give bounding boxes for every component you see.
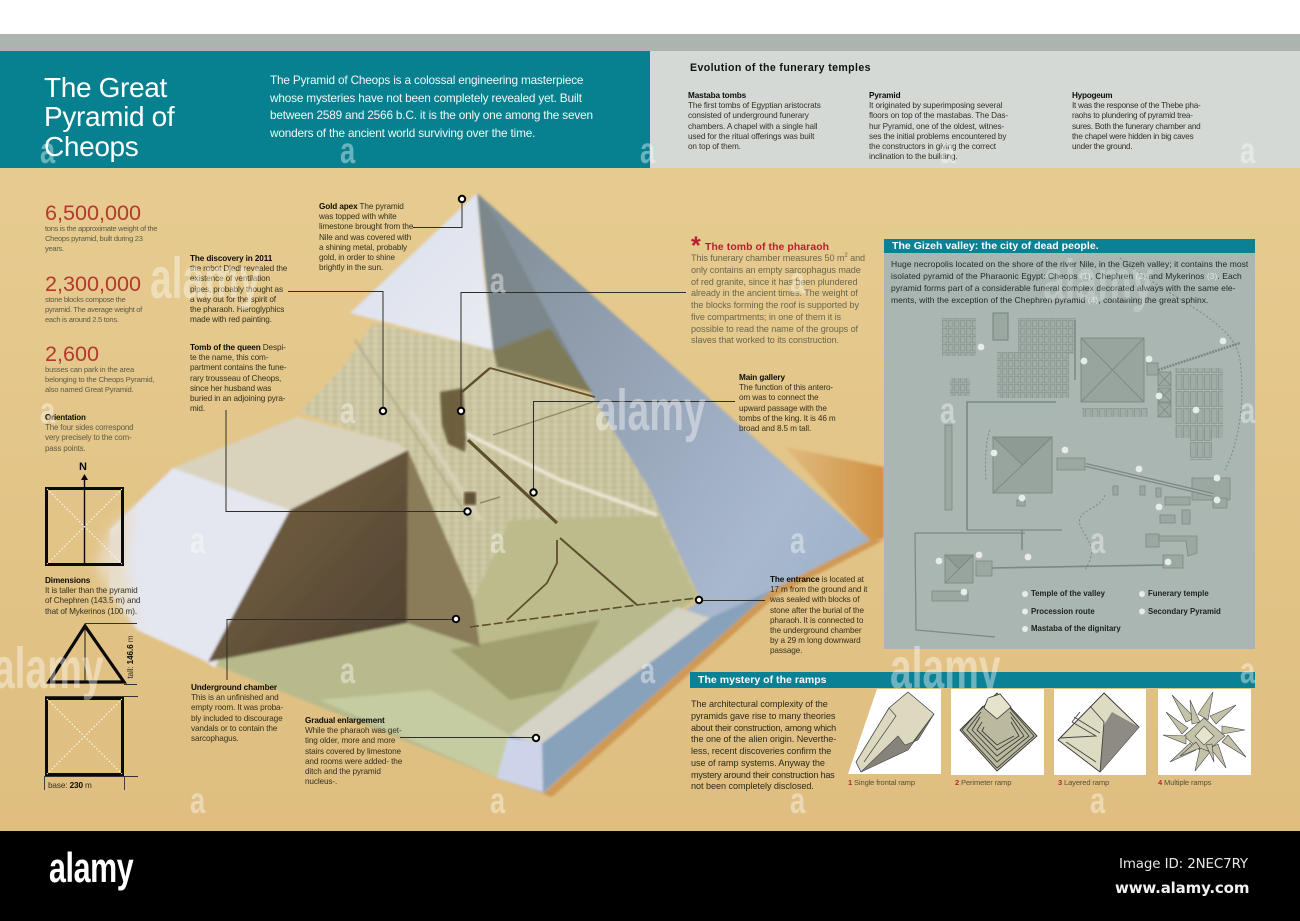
watermarks: a xyxy=(640,129,656,171)
callout: main gallery: The function of this antero- xyxy=(739,383,833,392)
callout: gradual enlargement xyxy=(305,716,402,786)
text: hypogeum: Hypogeum xyxy=(1072,91,1112,100)
white stripes xyxy=(463,432,657,515)
watermarks: a xyxy=(1240,389,1256,431)
callout: underground chamber: bly included to discourage xyxy=(191,714,283,723)
text: pyramid: the constructors in giving the correct xyxy=(869,142,996,151)
callout: main gallery xyxy=(739,373,836,433)
text: mastaba tombs: chambers. A chapel with a single hall xyxy=(688,122,817,131)
stat: 6,500,000: years. xyxy=(45,244,64,253)
callout: gradual enlargement: ditch and the pyramid xyxy=(305,767,381,776)
intro text: whose mysteries have not been completely revealed yet. Built xyxy=(270,91,582,105)
ramp illustration 1: single frontal ramp xyxy=(848,689,941,774)
text: Gizeh valley: pyramid forms part of a considerable funeral complex decorated always with the same ele- xyxy=(891,283,1236,293)
callout: gradual enlargement: While the pharaoh was get- xyxy=(305,726,402,735)
label: tall: tall: 146.6 m xyxy=(126,636,135,679)
text: tomb of the pharaoh xyxy=(691,252,865,345)
text: tomb of the pharaoh: of red granite, since it has been plundered xyxy=(691,276,857,286)
callout: discovery in 2011: a way out for the spirit of xyxy=(190,295,276,304)
watermarks: a xyxy=(340,129,356,171)
ramp illustration 4: multiple ramps xyxy=(1158,689,1251,775)
north label: N xyxy=(79,461,87,473)
watermarks: a xyxy=(940,129,956,171)
callout: gold apex: a shining metal, probably xyxy=(319,243,407,252)
text: tomb of the pharaoh: possible to read the name of the groups of xyxy=(691,324,858,334)
stat: 2,600: also named Great Pyramid. xyxy=(45,385,134,394)
king chamber xyxy=(440,388,466,452)
text: Gizeh valley: Huge necropolis located on the shore of the river Nile, in the Gizeh valley; it contains the most xyxy=(891,259,1248,269)
text: ramps: not been completely disclosed. xyxy=(691,781,814,791)
callout: the entrance: pharaoh. It is connected to xyxy=(770,616,863,625)
text: ramps xyxy=(691,699,836,791)
text: dimensions xyxy=(45,576,140,616)
stat: 6,500,000 xyxy=(45,200,158,253)
pyramid of Chephren xyxy=(993,437,1052,493)
stat: 2,300,000: stone blocks compose the xyxy=(45,295,125,304)
text: tomb of the pharaoh: already in the ancient times. The weight of xyxy=(691,288,858,298)
text: ramps: use of ramp systems. Anyway the xyxy=(691,758,825,768)
map legend xyxy=(1031,589,1221,633)
stat: 6,500,000: 6,500,000 xyxy=(45,200,141,225)
callout: main gallery: upward passage with the xyxy=(739,404,827,413)
watermarks: a xyxy=(490,259,506,301)
watermarks: a xyxy=(790,259,806,301)
heading bar: ramps: The mystery of the ramps xyxy=(698,674,827,686)
watermarks: a xyxy=(1090,779,1106,821)
text: pyramid: It originated by superimposing several xyxy=(869,101,1002,110)
ramp captions: 3 Layered ramp xyxy=(1058,778,1109,787)
callout: main gallery: tombs of the king. It is 46 m xyxy=(739,414,836,423)
desert shadow xyxy=(785,447,884,541)
text: Gizeh valley: isolated pyramid of the Pharaonic Egypt: Cheops (1), Chephren (2) and Mykerinos (3). Each xyxy=(891,271,1242,281)
text: tomb of the pharaoh: the blocks forming the roof is supported by xyxy=(691,300,859,310)
watermarks: a xyxy=(1240,129,1256,171)
callout: underground chamber: This is an unfinished and xyxy=(191,693,279,702)
panel: Gizeh map xyxy=(884,253,1255,649)
map legend: Procession route xyxy=(1031,606,1095,616)
watermarks: a xyxy=(190,779,206,821)
callout: tomb of the queen: partment contains the fune- xyxy=(190,363,286,372)
text: hypogeum: sures. Both the funerary chamber and xyxy=(1072,122,1200,131)
watermarks: alamy xyxy=(150,248,261,311)
map number markers xyxy=(936,338,1226,632)
text: tomb of the pharaoh: only contains an empty sarcophagus made xyxy=(691,265,861,275)
stone core xyxy=(208,323,697,778)
text: ramps: less, recent discoveries confirm the xyxy=(691,746,831,756)
watermarks: a xyxy=(790,519,806,561)
text: hypogeum: It was the response of the Thebe pha- xyxy=(1072,101,1201,110)
heading: tomb of the pharaoh: * xyxy=(691,232,701,260)
white top face xyxy=(350,193,493,350)
text: Gizeh valley: ments, with the exception of the Chephren pyramid (4), containing the great sphinx. xyxy=(891,295,1208,305)
heading bar: Gizeh valley: The Gizeh valley: the city of dead people. xyxy=(892,240,1099,252)
stat: 2,600: belonging to the Cheops Pyramid, xyxy=(45,375,154,384)
text: mastaba tombs: Mastaba tombs xyxy=(688,91,746,100)
text: orientation: pass points. xyxy=(45,444,86,453)
text: tomb of the pharaoh: slaves that worked to its construction. xyxy=(691,335,839,345)
watermarks: alamy xyxy=(890,638,1001,701)
ramp illustration 2: perimeter ramp xyxy=(951,689,1044,775)
heading bar: Gizeh valley xyxy=(884,239,1255,253)
map legend: Temple of the valley xyxy=(1031,589,1105,598)
callout: tomb of the queen: buried in an adjoining pyra- xyxy=(190,394,285,403)
text: pyramid: Pyramid xyxy=(869,91,900,100)
text: ramps: pyramids gave rise to many theories xyxy=(691,711,835,721)
text: orientation: very precisely to the com- xyxy=(45,433,131,442)
text: hypogeum xyxy=(1072,91,1201,151)
intro text xyxy=(270,73,593,140)
callout dots xyxy=(380,196,702,741)
watermarks: a xyxy=(640,649,656,691)
footer logo: alamy xyxy=(49,845,133,891)
watermarks: a xyxy=(1240,649,1256,691)
callout: tomb of the queen: rary trousseau of Cheops, xyxy=(190,374,281,383)
text: ramps: The architectural complexity of the xyxy=(691,699,828,709)
callout: the entrance: 17 m from the ground and it xyxy=(770,585,867,594)
text: mastaba tombs: used for the ritual offerings was built xyxy=(688,132,814,141)
callout: gold apex: was topped with white xyxy=(319,212,397,221)
pyramid of Mykerinos xyxy=(945,555,973,583)
footer image id: Image ID: 2NEC7RY xyxy=(1119,857,1248,872)
pyramid of Cheops xyxy=(1081,338,1144,402)
intro text: wonders of the ancient world surviving over the time. xyxy=(270,126,535,140)
text: ramps: mystery around their construction has xyxy=(691,770,834,780)
callout: the entrance xyxy=(770,575,868,655)
text: dimensions: It is taller than the pyramid xyxy=(45,586,138,595)
ramp captions xyxy=(848,778,1212,787)
inner passages xyxy=(462,368,697,627)
label: base: base: 230 m xyxy=(48,781,92,790)
text: dimensions: that of Mykerinos (100 m). xyxy=(45,607,137,616)
text: pyramid xyxy=(869,91,1008,161)
watermarks: alamy xyxy=(595,380,706,443)
callout: the entrance: the underground chamber xyxy=(770,626,861,635)
left fade of white face xyxy=(95,505,137,630)
stat: 2,300,000: pyramid. The average weight of xyxy=(45,305,142,314)
east cemetery xyxy=(1175,368,1223,438)
callout: the entrance: by a 29 m long downward xyxy=(770,636,861,645)
map legend: Mastaba of the dignitary xyxy=(1031,624,1121,633)
front corner xyxy=(497,738,543,792)
callout: tomb of the queen: mid. xyxy=(190,404,205,413)
watermarks: a xyxy=(190,519,206,561)
ramp captions: 4 Multiple ramps xyxy=(1158,778,1211,787)
text: dimensions: of Chephren (143.5 m) and xyxy=(45,596,140,605)
secondary pyramids and temples xyxy=(932,363,1230,601)
watermarks: a xyxy=(490,519,506,561)
pyramid cutaway illustration xyxy=(95,193,884,797)
ramp illustration 3: layered ramp xyxy=(1054,689,1146,775)
callout: discovery in 2011: the robot Djedi revealed the xyxy=(190,264,287,273)
stat: 6,500,000: Cheops pyramid, built during 23 xyxy=(45,234,143,243)
callout: tomb of the queen: since her husband was xyxy=(190,384,271,393)
white ramp strip xyxy=(510,607,710,745)
intro text: between 2589 and 2566 b.C. it is the only one among the seven xyxy=(270,108,593,122)
text: pyramid: floors on top of the mastabas. The Das- xyxy=(869,111,1008,120)
callout: underground chamber: sarcophagus. xyxy=(191,734,239,743)
callout: discovery in 2011: pipes, probably thought as xyxy=(190,285,283,294)
watermarks: a xyxy=(40,129,56,171)
stat: 2,300,000 xyxy=(45,271,142,324)
callout: discovery in 2011: existence of ventilation xyxy=(190,274,270,283)
green floor xyxy=(208,597,697,778)
title xyxy=(44,72,175,162)
callout: tomb of the queen xyxy=(190,343,286,413)
callout: gradual enlargement: and rooms were added- the xyxy=(305,757,402,766)
callout: the entrance: passage. xyxy=(770,646,802,655)
callout: gold apex: gold, in order to shine xyxy=(319,253,395,262)
callout: gradual enlargement: stairs covered by limestone xyxy=(305,747,401,756)
stat: 6,500,000: tons is the approximate weight of the xyxy=(45,224,157,233)
callout: underground chamber: vandals or to contain the xyxy=(191,724,277,733)
callout: the entrance: The entrance is located at xyxy=(770,575,864,584)
text: mastaba tombs: on top of them. xyxy=(688,142,741,151)
causeways and walls xyxy=(915,258,1242,637)
queen chamber xyxy=(464,492,476,505)
callout: gold apex: brightly in the sun. xyxy=(319,263,383,272)
left stone band xyxy=(173,417,408,510)
callout: gradual enlargement: nucleus-. xyxy=(305,777,337,786)
watermarks: a xyxy=(340,389,356,431)
heading: tomb of the pharaoh xyxy=(691,232,829,260)
callout: discovery in 2011: the pharaoh. Hieroglyphics xyxy=(190,305,284,314)
heading bar: ramps xyxy=(690,672,1255,688)
map legend: Secondary Pyramid xyxy=(1148,606,1221,616)
callout: gradual enlargement: Gradual enlargement xyxy=(305,716,385,725)
heading: evolution of the funerary temples: Evolution of the funerary temples xyxy=(690,62,871,74)
callout: gold apex: Nile and was covered with xyxy=(319,233,411,242)
callout: gradual enlargement: ting older, more and more xyxy=(305,736,395,745)
callout: discovery in 2011 xyxy=(190,254,287,324)
orientation diagram xyxy=(46,474,122,564)
callout: the entrance: was sealed with blocks of xyxy=(770,595,859,604)
stat: 2,600: 2,600 xyxy=(45,341,99,366)
text: mastaba tombs: consisted of underground funerary xyxy=(688,111,809,120)
callout: discovery in 2011: The discovery in 2011 xyxy=(190,254,272,263)
text: orientation xyxy=(45,413,134,453)
map legend: Funerary temple xyxy=(1148,589,1209,598)
text: orientation: The four sides correspond xyxy=(45,423,133,432)
text: dimensions: Dimensions xyxy=(45,576,90,585)
text: tomb of the pharaoh: This funerary chamber measures 50 m2 and xyxy=(691,253,865,263)
stat: 2,300,000: each is around 2.5 tons. xyxy=(45,315,119,324)
blue outer faces xyxy=(477,193,870,793)
text: ramps: the one of the alien origin. Neverthe- xyxy=(691,734,836,744)
ramp captions: 1 Single frontal ramp xyxy=(848,778,915,787)
stat: 2,600: busses can park in the area xyxy=(45,365,134,374)
watermarks: a xyxy=(40,389,56,431)
watermarks: a xyxy=(340,649,356,691)
callout: main gallery: om was to connect the xyxy=(739,393,818,402)
text: hypogeum: the chapel were hidden in big caves xyxy=(1072,132,1193,141)
watermarks: a xyxy=(940,389,956,431)
text: Gizeh valley xyxy=(891,259,1248,305)
text: hypogeum: under the ground. xyxy=(1072,142,1132,151)
callout: underground chamber: empty room. It was proba- xyxy=(191,703,283,712)
text: hypogeum: raohs to plundering of pyramid trea- xyxy=(1072,111,1193,120)
callout: gold apex xyxy=(319,202,414,272)
text: pyramid: inclination to the building. xyxy=(869,152,958,161)
title: Cheops xyxy=(44,130,138,162)
watermarks: alamy xyxy=(1043,250,1154,313)
callout: discovery in 2011: made with red painting. xyxy=(190,315,272,324)
text: ramps: about their construction, among which xyxy=(691,722,836,732)
watermarks: a xyxy=(790,779,806,821)
callout: underground chamber: Underground chamber xyxy=(191,683,277,692)
callout: underground chamber xyxy=(191,683,283,743)
ramp captions: 2 Perimeter ramp xyxy=(955,778,1011,787)
stat: 2,300,000: 2,300,000 xyxy=(45,271,141,296)
title: Pyramid of xyxy=(44,101,174,132)
text: pyramid: hur Pyramid, one of the oldest, witnes- xyxy=(869,122,1004,131)
callout: tomb of the queen: Tomb of the queen Despi- xyxy=(190,343,286,352)
west cemetery xyxy=(942,318,976,356)
leader lines xyxy=(226,199,765,738)
callout: tomb of the queen: te the name, this com- xyxy=(190,353,268,362)
callout: main gallery: Main gallery xyxy=(739,373,785,382)
watermarks: a xyxy=(1090,519,1106,561)
footer url: www.alamy.com xyxy=(1115,879,1249,897)
stat: 2,600 xyxy=(45,341,154,394)
callout: main gallery: broad and 8.5 m tall. xyxy=(739,424,811,433)
text: orientation: Orientation xyxy=(45,413,86,422)
watermarks: a xyxy=(490,779,506,821)
title: The Great xyxy=(44,72,167,102)
text: pyramid: ses the initial problems encountered by xyxy=(869,132,1006,141)
callout: the entrance: stone after the burial of the xyxy=(770,606,864,615)
base diagram xyxy=(44,696,138,790)
heading: tomb of the pharaoh: The tomb of the pharaoh xyxy=(705,242,829,253)
height diagram xyxy=(49,624,137,684)
text: tomb of the pharaoh: five compartments; in one of them it is xyxy=(691,312,841,322)
inner brown walls xyxy=(407,450,480,647)
callout: gold apex: Gold apex The pyramid xyxy=(319,202,404,211)
text: mastaba tombs: The first tombs of Egyptian aristocrats xyxy=(688,101,821,110)
intro text: The Pyramid of Cheops is a colossal engineering masterpiece xyxy=(270,73,583,87)
callout: gold apex: limestone brought from the xyxy=(319,222,413,231)
text: mastaba tombs xyxy=(688,91,821,151)
